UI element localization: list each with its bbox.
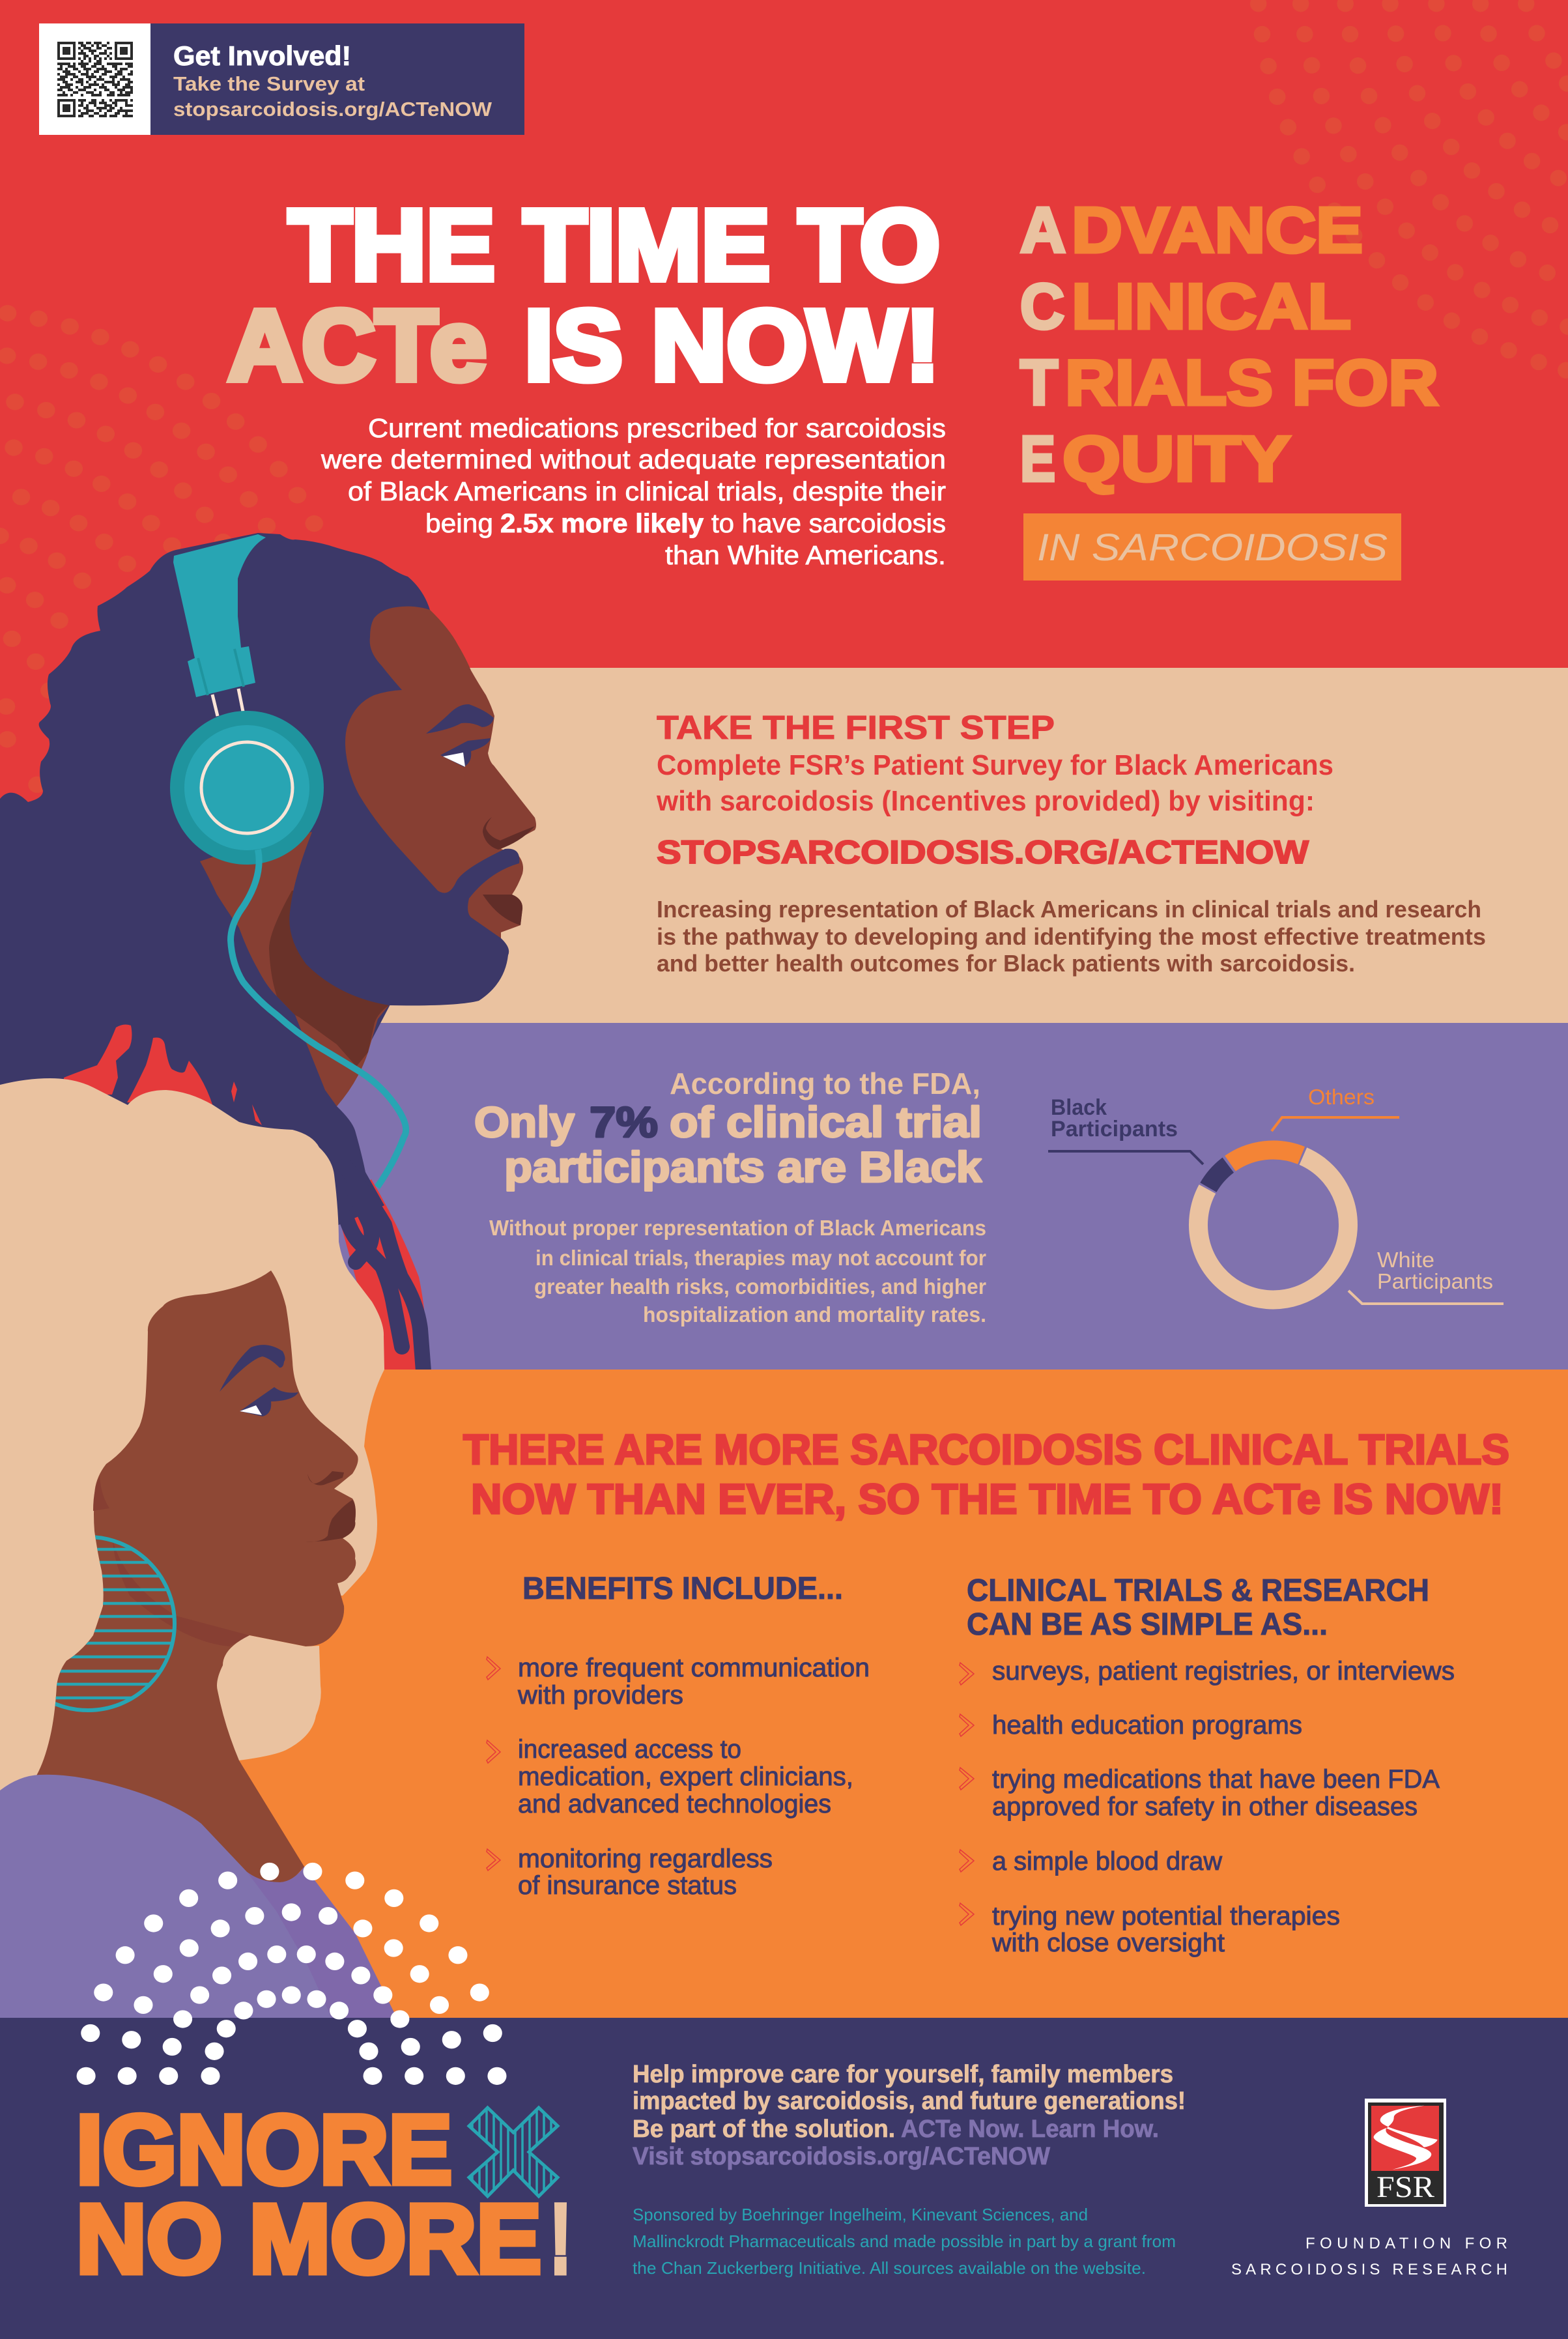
logo: no more: NO MORE (76, 2184, 541, 2293)
footer call to action: impacted by sarcoidosis, and future generations! (633, 2088, 1186, 2115)
statistic heading: 7% (590, 1098, 658, 1146)
survey call to action: with sarcoidosis (Incentives provided) by visiting: (656, 785, 1315, 817)
survey call to action: Complete FSR’s Patient Survey for Black Americans (657, 749, 1333, 781)
ACTe acronym heading: C (1020, 270, 1064, 342)
donut chart (1198, 1150, 1348, 1300)
statistic heading: According to the FDA, (670, 1067, 980, 1100)
benefits list: of insurance status (518, 1871, 737, 1900)
donut label: black participants: Black (1051, 1095, 1107, 1120)
sponsor text: the Chan Zuckerberg Initiative. All sources available on the website. (633, 2258, 1146, 2278)
banner: text: Get Involved! (173, 40, 351, 71)
ignore no more logo (79, 2106, 567, 2276)
man: headphone ear cup (170, 711, 324, 865)
statistic heading: of clinical trial (670, 1098, 982, 1146)
man: eye (440, 738, 491, 767)
intro paragraph: of Black Americans in clinical trials, despite their (348, 476, 946, 506)
man: red backdrop behind locks (335, 1179, 430, 1370)
banner: text: stopsarcoidosis.org/ACTeNOW (173, 98, 492, 121)
clinical trials list: trying medications that have been FDA (992, 1765, 1440, 1794)
sponsor text: Mallinckrodt Pharmaceuticals and made possible in part by a grant from (633, 2231, 1176, 2251)
column heading: benefits: BENEFITS INCLUDE... (522, 1571, 843, 1606)
get involved banner (39, 23, 524, 135)
man: lips (483, 895, 522, 925)
donut label: others (1272, 1085, 1399, 1131)
man: red gaps between hair (64, 1025, 262, 1125)
clinical trials list: trying new potential therapies (992, 1902, 1340, 1930)
FSR logo: swoosh (1374, 2106, 1438, 2170)
ACTe acronym heading: RIALS FOR (1065, 347, 1438, 418)
footer call to action: Be part of the solution. (633, 2116, 895, 2143)
FSR logo: letters: FSR (1376, 2170, 1435, 2204)
benefits list: more frequent communication (518, 1654, 870, 1682)
foundation name (1231, 2235, 1507, 2278)
intro paragraph: than White Americans. (665, 540, 946, 570)
intro paragraph: Current medications prescribed for sarcoidosis (368, 413, 946, 443)
donut label: black participants (1048, 1095, 1203, 1164)
explanation text: Increasing representation of Black Americans in clinical trials and research (657, 896, 1481, 923)
woman: shirt (0, 1775, 397, 2018)
woman: hair (0, 1078, 384, 1798)
in sarcoidosis tag: IN SARCOIDOSIS (1037, 526, 1388, 569)
statistic heading: participants are Black (504, 1143, 982, 1191)
dot pattern: top right (1250, 0, 1568, 379)
section heading: NOW THAN EVER, SO THE TIME TO ACTe IS NOW! (471, 1475, 1504, 1523)
statistic paragraph (489, 1216, 986, 1327)
woman: jaw shadow (93, 1476, 249, 1646)
logo: striped x (469, 2104, 558, 2199)
clinical trials list: health education programs (992, 1711, 1302, 1740)
woman: lips (306, 1500, 356, 1542)
column heading: clinical trials (967, 1573, 1429, 1642)
statistic heading: Only (474, 1098, 575, 1146)
title: ACTe (228, 289, 487, 401)
man: hair locks (340, 1207, 431, 1370)
intro paragraph (321, 413, 946, 570)
dot pattern: left (0, 305, 323, 793)
man: headphone wires (212, 689, 243, 716)
woman: nostril (307, 1471, 344, 1485)
banner: navy panel (150, 23, 524, 135)
man: nose shadow (483, 817, 535, 850)
banner: text: Take the Survey at (173, 72, 365, 95)
intro paragraph: being (425, 508, 493, 538)
benefits list: increased access to (518, 1735, 741, 1764)
statistic paragraph: Without proper representation of Black Americans (489, 1216, 986, 1240)
donut label: white participants: White (1377, 1248, 1434, 1272)
benefits list: with providers (517, 1681, 683, 1710)
ACTe acronym heading: T (1020, 347, 1058, 418)
ACTe acronym heading: E (1020, 423, 1055, 495)
white dots arch (77, 1863, 506, 2085)
sponsor text: Sponsored by Boehringer Ingelheim, Kinevant Sciences, and (633, 2205, 1088, 2224)
benefits list: medication, expert clinicians, (518, 1762, 853, 1791)
logo: ignore: IGNORE (76, 2095, 452, 2204)
title: IS NOW! (524, 289, 940, 401)
panel: FDA statistic (474, 1067, 1504, 1327)
intro paragraph: to have sarcoidosis (711, 508, 946, 538)
FSR logo (1365, 2099, 1446, 2207)
banner: white QR panel (39, 23, 150, 135)
illustration: man with headphones (0, 533, 536, 1388)
ACTe acronym heading (1020, 194, 1438, 495)
clinical trials list: approved for safety in other diseases (992, 1792, 1418, 1821)
ACTe acronym heading: QUITY (1062, 423, 1290, 495)
section heading (463, 1426, 1509, 1523)
man: hair (0, 533, 456, 1225)
woman: face and neck (36, 1270, 358, 1886)
intro paragraph: 2.5x more likely (500, 508, 704, 538)
ACTe acronym heading: LINICAL (1072, 270, 1351, 342)
panel: take the first step (656, 709, 1486, 977)
benefits list (517, 1654, 870, 1900)
donut label: others: Others (1308, 1085, 1375, 1109)
explanation text (657, 896, 1486, 977)
explanation text: and better health outcomes for Black patients with sarcoidosis. (657, 950, 1355, 977)
woman: eye (240, 1387, 298, 1416)
banner: QR code (57, 42, 133, 117)
foundation name: SARCOIDOSIS RESEARCH (1231, 2261, 1507, 2278)
donut label: black participants: Participants (1051, 1117, 1178, 1141)
woman: tan hair under chin (217, 1635, 321, 1760)
logo: exclamation: ! (550, 2184, 571, 2293)
man: headphone band (173, 534, 266, 697)
clinical trials list: a simple blood draw (992, 1847, 1222, 1876)
clinical trials list: surveys, patient registries, or interviews (992, 1657, 1455, 1686)
title (228, 189, 940, 401)
statistic paragraph: in clinical trials, therapies may not account for (535, 1246, 986, 1270)
in sarcoidosis tag (1023, 513, 1401, 581)
benefits list: and advanced technologies (518, 1790, 831, 1818)
column heading: clinical trials: CLINICAL TRIALS & RESEARCH (967, 1573, 1429, 1608)
footer call to action: Help improve care for yourself, family members (633, 2061, 1173, 2088)
footer call to action: ACTe Now. Learn How. (901, 2116, 1159, 2143)
man: beard (289, 749, 519, 1005)
panel: more clinical trials (463, 1426, 1509, 1957)
footer call to action: Visit stopsarcoidosis.org/ACTeNOW (633, 2143, 1050, 2170)
explanation text: is the pathway to developing and identifying the most effective treatments (657, 923, 1486, 950)
section heading: THERE ARE MORE SARCOIDOSIS CLINICAL TRIALS (463, 1426, 1509, 1473)
intro paragraph: were determined without adequate representation (321, 444, 946, 474)
woman: eyebrow (220, 1345, 285, 1392)
heading: TAKE THE FIRST STEP (657, 709, 1055, 746)
title: THE TIME TO (289, 189, 940, 301)
clinical trials chevrons (960, 1663, 974, 1925)
ACTe acronym heading: DVANCE (1072, 194, 1363, 266)
man: ear and neck skin (200, 832, 389, 1106)
woman: hoop earring (55, 1535, 177, 1712)
banner: text (173, 40, 492, 121)
benefits chevrons (487, 1657, 500, 1871)
man: neck shadow (269, 891, 389, 1067)
benefits list: monitoring regardless (518, 1844, 773, 1873)
footer call to action (633, 2061, 1186, 2170)
statistic paragraph: hospitalization and mortality rates. (643, 1302, 986, 1327)
donut label: white participants: Participants (1377, 1269, 1493, 1293)
illustration: woman with blonde hair (0, 1078, 397, 2018)
survey call to action (656, 749, 1333, 817)
man: eyebrow (426, 704, 494, 734)
clinical trials list: with close oversight (991, 1929, 1225, 1957)
ACTe acronym heading: A (1020, 194, 1066, 266)
donut label: white participants (1348, 1248, 1504, 1304)
clinical trials list (991, 1657, 1455, 1957)
statistic heading (474, 1067, 982, 1191)
man: headphone cable (231, 850, 406, 1187)
column heading: clinical trials: CAN BE AS SIMPLE AS... (967, 1607, 1328, 1642)
foundation name: FOUNDATION FOR (1305, 2235, 1507, 2252)
statistic paragraph: greater health risks, comorbidities, and higher (534, 1274, 986, 1299)
survey url: STOPSARCOIDOSIS.ORG/ACTENOW (657, 834, 1309, 870)
man: face (345, 607, 536, 941)
sponsor text (633, 2205, 1176, 2278)
